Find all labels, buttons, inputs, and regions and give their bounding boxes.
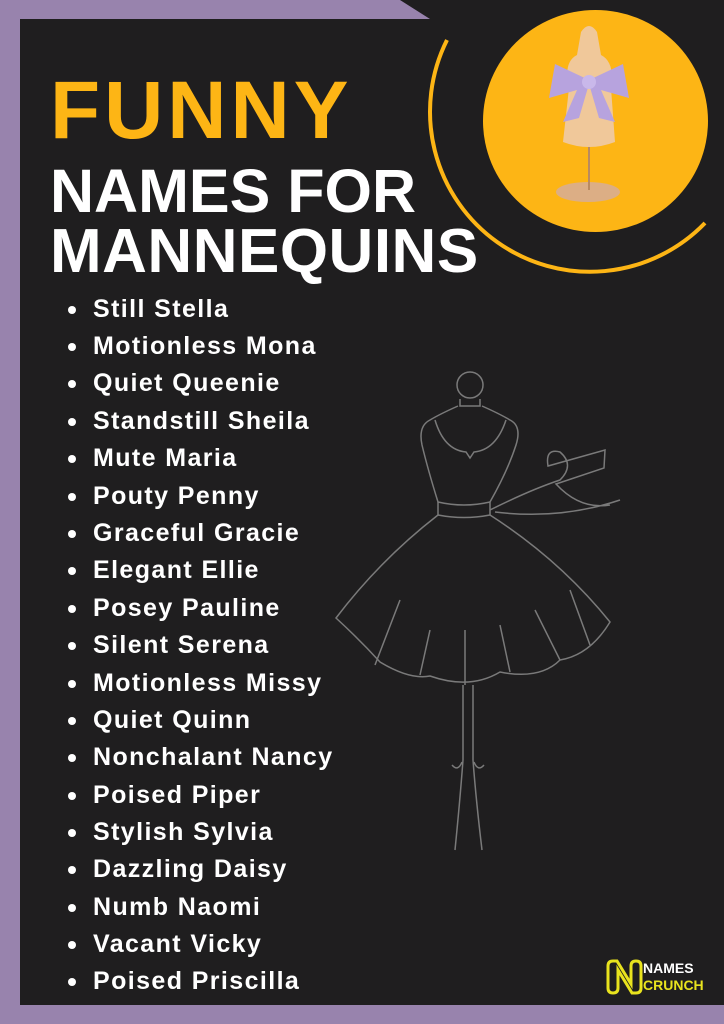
text: Quiet Quinn xyxy=(93,706,251,734)
text: Standstill Sheila xyxy=(93,407,310,435)
yellow circle with mannequin image xyxy=(483,10,708,232)
list of names xyxy=(68,295,334,995)
text: Vacant Vicky xyxy=(93,930,262,958)
text: Motionless Mona xyxy=(93,332,317,360)
icon: mini mannequin with bow xyxy=(549,26,629,202)
logo text: NAMES xyxy=(643,960,694,976)
text: Silent Serena xyxy=(93,631,270,659)
text: Dazzling Daisy xyxy=(93,855,288,883)
text: Poised Priscilla xyxy=(93,967,300,995)
icon: N logo xyxy=(606,960,642,994)
text: Poised Piper xyxy=(93,781,261,809)
heading: FUNNY: FUNNY xyxy=(50,65,352,156)
text: Still Stella xyxy=(93,295,229,323)
heading: NAMES FOR: NAMES FOR xyxy=(50,157,416,225)
text: Mute Maria xyxy=(93,444,238,472)
text: Numb Naomi xyxy=(93,893,261,921)
text: Pouty Penny xyxy=(93,482,260,510)
text: Nonchalant Nancy xyxy=(93,743,334,771)
logo: Names Crunch xyxy=(606,960,704,994)
text: Quiet Queenie xyxy=(93,369,281,397)
text: Graceful Gracie xyxy=(93,519,300,547)
text: Stylish Sylvia xyxy=(93,818,274,846)
title xyxy=(50,65,479,286)
text: Posey Pauline xyxy=(93,594,281,622)
logo: Names Crunch: CRUNCH xyxy=(643,977,704,993)
text: Motionless Missy xyxy=(93,669,322,697)
text: Elegant Ellie xyxy=(93,556,260,584)
heading: MANNEQUINS: MANNEQUINS xyxy=(50,217,479,286)
